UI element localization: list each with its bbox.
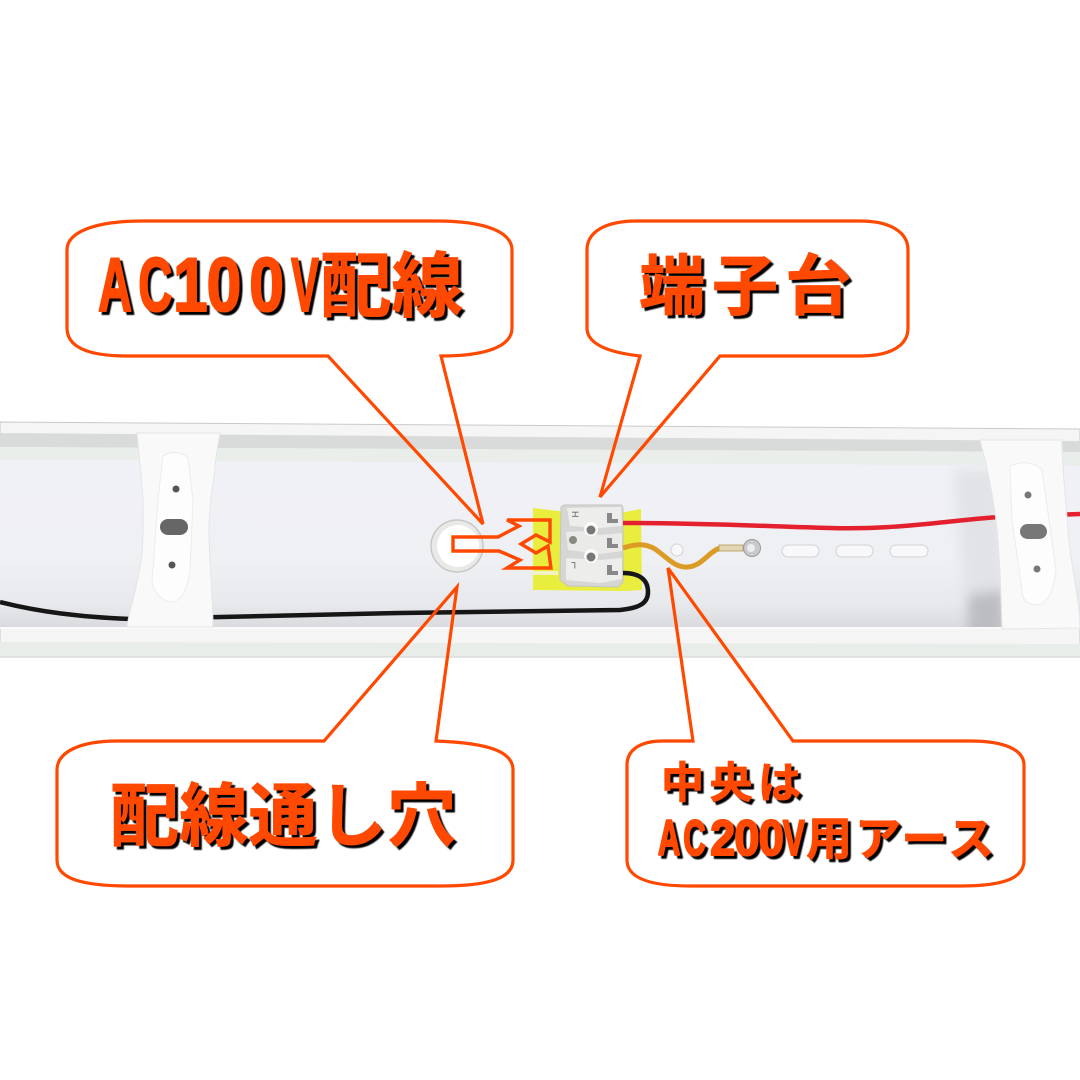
callout: AC100V wiring [67, 221, 512, 524]
inner panel [0, 460, 1080, 629]
yellow earth wire [623, 545, 720, 567]
wiring hole [431, 520, 483, 572]
terminal block assembly [533, 505, 642, 591]
callout: AC200V earth [627, 568, 1024, 886]
label: terminal block: 端子台 [639, 233, 851, 329]
terminal block assembly: L [571, 560, 576, 570]
top inner shadow band [0, 433, 1080, 452]
label: AC200V earth: V [783, 810, 805, 866]
label: AC100V wiring: AC [98, 244, 172, 328]
right bracket [980, 440, 1080, 629]
small hole [671, 544, 683, 556]
label: AC100V wiring [98, 230, 463, 332]
top inner ledge [0, 447, 1080, 466]
label: AC200V earth: AC [658, 809, 706, 866]
bottom rim stripes [0, 642, 1080, 656]
label: AC100V wiring: 配線 [320, 230, 463, 332]
label: AC100V wiring: 100 [173, 242, 284, 327]
terminal marks: H [570, 511, 580, 518]
terminal body [560, 505, 623, 587]
label: AC200V earth: 用アース [806, 803, 994, 869]
yellow tape [533, 508, 642, 591]
arrow: wiring path into terminal block [453, 520, 551, 568]
outer housing [0, 422, 1080, 657]
label: AC100V wiring: V [291, 242, 319, 327]
callout: wiring hole [57, 587, 513, 886]
earth crimp terminal and screw [719, 540, 760, 556]
shadows beside right bracket [955, 471, 1002, 627]
tape white patches [533, 571, 558, 575]
label: centre is: 中央は [661, 749, 801, 811]
bracket holes [1024, 492, 1032, 498]
label: AC200V earth [658, 803, 994, 869]
left bracket [127, 433, 220, 627]
terminal screws [584, 522, 598, 536]
mount slots [782, 545, 928, 557]
callout: terminal block [587, 221, 908, 497]
label: AC200V earth: 200 [710, 811, 784, 867]
red wire [623, 514, 1080, 528]
terminal tabs [567, 507, 622, 528]
bracket holes [172, 486, 180, 492]
light fixture body [0, 422, 1080, 657]
label: wiring hole: 配線通し穴 [110, 760, 456, 860]
black wire [0, 573, 648, 619]
